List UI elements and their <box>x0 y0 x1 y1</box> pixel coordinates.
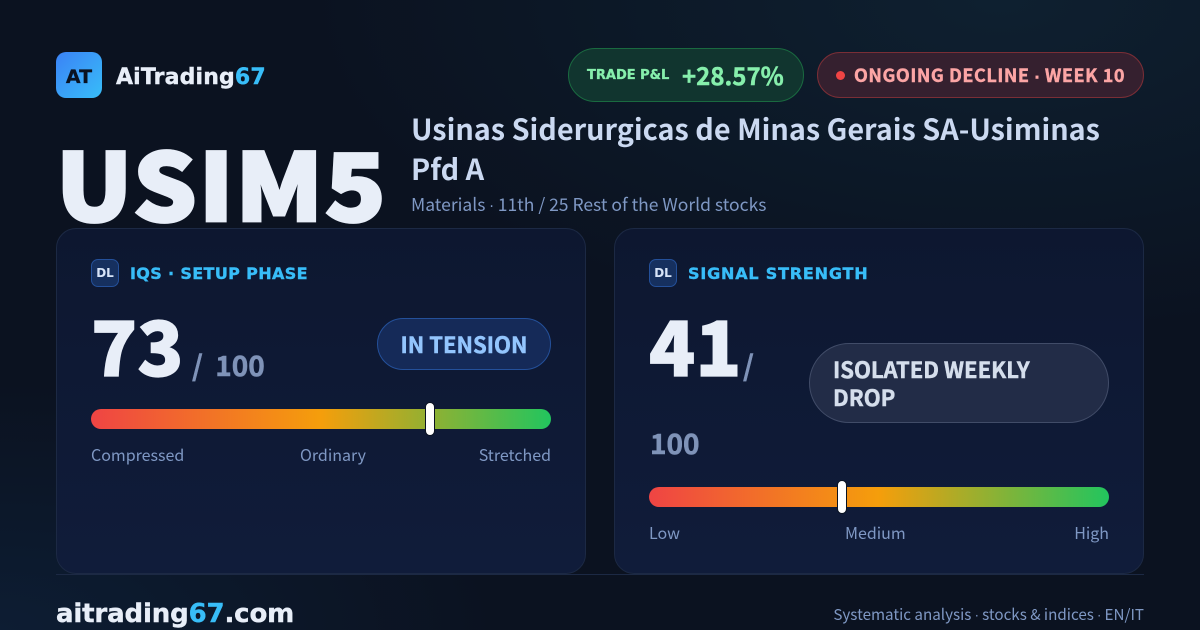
pill: ongoing decline <box>817 52 1144 98</box>
gauge label medium: Medium <box>845 520 906 544</box>
logo wordmark: AiTrading67 <box>116 65 266 90</box>
denominator: 100 <box>650 423 700 463</box>
gauge marker IQS <box>425 402 435 436</box>
pill: trade P&L <box>568 48 804 102</box>
badge DL: DL <box>654 266 672 280</box>
footer tagline: Systematic analysis · stocks & indices · EN/IT <box>833 603 1144 625</box>
gauge bar IQS <box>91 409 551 429</box>
ticker: USIM5 <box>56 113 388 248</box>
P&L label: TRADE P&L <box>587 68 669 83</box>
gauge labels: Compressed <box>91 442 184 466</box>
status pill: isolated <box>809 343 1109 423</box>
P&L value: +28.57% <box>682 57 784 92</box>
panel: signal <box>614 228 1144 574</box>
logo <box>56 52 266 98</box>
gauge bar signal <box>649 487 1109 507</box>
company name <box>411 108 1100 189</box>
slash: / <box>743 345 754 385</box>
score denominator: / 100 <box>192 345 265 385</box>
status text: ONGOING DECLINE · WEEK 10 <box>854 62 1125 88</box>
badge DL <box>91 259 119 287</box>
badge DL <box>649 259 677 287</box>
panel: IQS <box>56 228 586 574</box>
logo mark <box>56 52 102 98</box>
footer rule <box>56 574 1144 575</box>
gauge label right: Stretched <box>479 442 551 466</box>
gauge marker signal <box>837 480 847 514</box>
footer brand: aitrading67.com <box>56 599 294 629</box>
logo mark: AT <box>66 66 92 88</box>
heading IQS: IQS · SETUP PHASE <box>130 264 308 283</box>
company name: Usinas Siderurgicas de Minas Gerais SA-Usiminas <box>411 108 1100 149</box>
score 73: 73 <box>91 288 184 398</box>
badge DL: DL <box>96 266 114 280</box>
status pill: in tension <box>377 318 551 370</box>
gauge label low: Low <box>649 520 680 544</box>
gauge label middle: Ordinary <box>300 442 366 466</box>
status pill: isolated: ISOLATED WEEKLY <box>833 353 1030 385</box>
status pill: in tension: IN TENSION <box>401 328 527 360</box>
heading signal: SIGNAL STRENGTH <box>688 264 868 283</box>
sector line: Materials · 11th / 25 Rest of the World stocks <box>411 192 766 217</box>
score 41: 41 <box>649 288 742 398</box>
company name: Pfd A <box>411 148 484 189</box>
status dot <box>836 71 845 80</box>
gauge label high: High <box>1074 520 1109 544</box>
status pill: isolated: DROP <box>833 381 895 413</box>
